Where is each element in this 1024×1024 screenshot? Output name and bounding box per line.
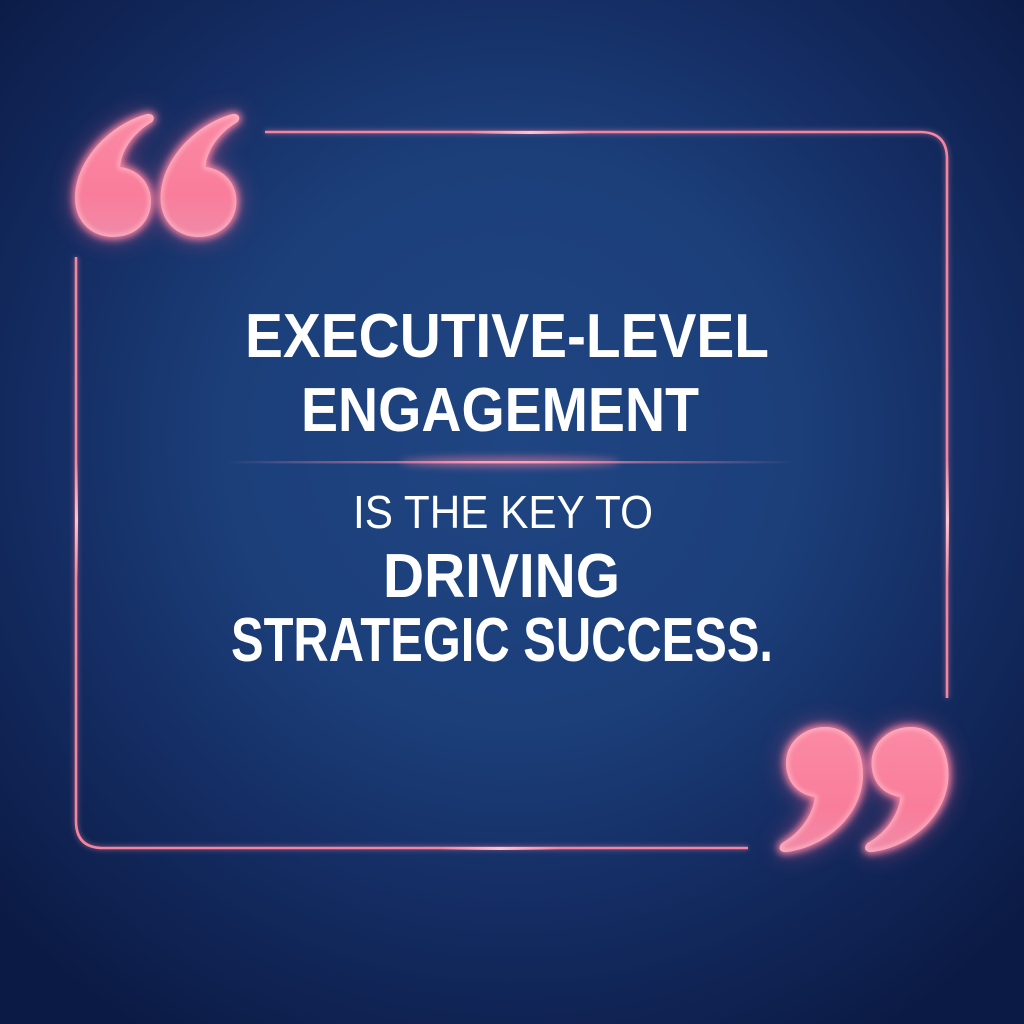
quote frame [75, 131, 949, 850]
divider [225, 457, 795, 467]
heading: executive-level engagement: EXECUTIVE-LEVEL [245, 302, 769, 371]
text: driving strategic success: DRIVING [383, 542, 620, 611]
text: is the key to: IS THE KEY TO [353, 486, 653, 538]
heading: executive-level engagement [245, 302, 769, 445]
text: driving strategic success: STRATEGIC SUCCESS. [231, 606, 773, 675]
heading: executive-level engagement: ENGAGEMENT [301, 376, 699, 445]
icon: closing quotation mark [780, 727, 948, 852]
icon: opening quotation mark [75, 114, 239, 237]
text: driving strategic success [231, 542, 773, 675]
